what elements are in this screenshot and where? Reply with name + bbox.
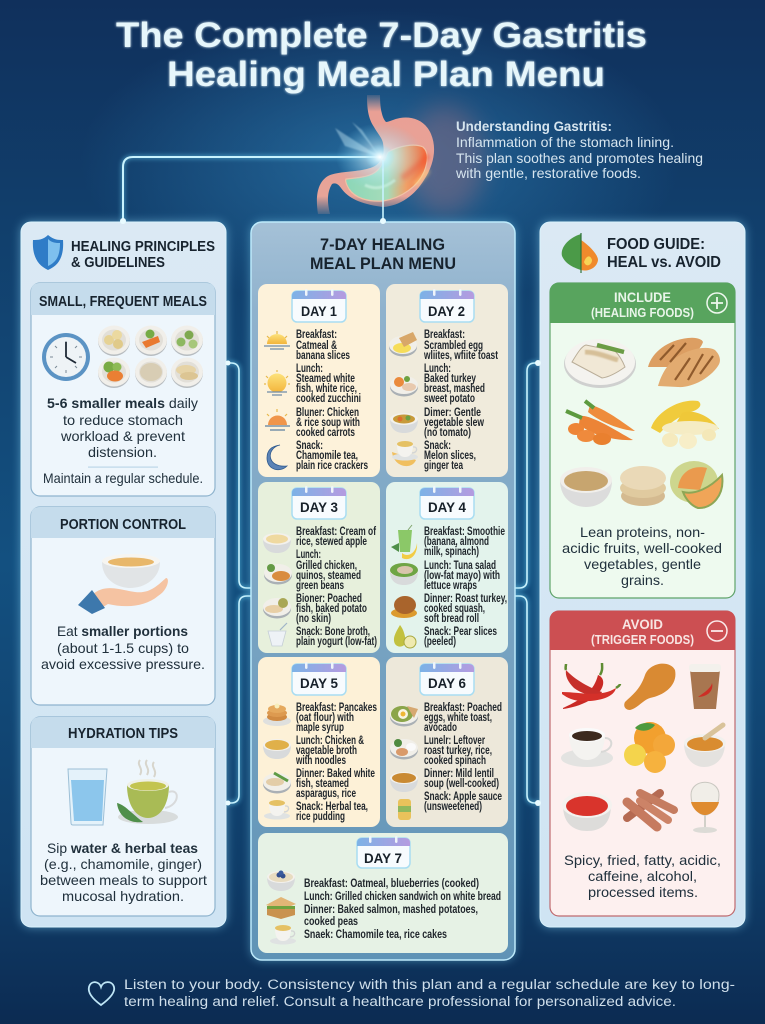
icon: bananas [651, 401, 719, 449]
icon: rice cakes [620, 466, 666, 506]
meal text: day 2: Snack: [424, 440, 451, 452]
icon: oatmeal with blueberries [267, 870, 295, 891]
meal text: day 6: (unsweetened) [424, 801, 482, 813]
panel: 7-day meal plan [251, 222, 515, 960]
icon: chili peppers [562, 663, 620, 709]
meal text: day 5: fish, steamed [296, 778, 349, 790]
icon: turkey plate [390, 376, 418, 396]
card text [564, 852, 721, 900]
card text: vegetables, gentle [584, 556, 701, 572]
icon: citrus [624, 722, 675, 773]
meal text: day 3: Bioner: Poached [296, 593, 362, 605]
heading: healing principles [71, 239, 215, 271]
meal text: day 2: Melon slices, [424, 450, 476, 462]
card text: Sip water & herbal teas [47, 840, 198, 856]
meal text: day 4: (low-fat mayo) with [424, 570, 500, 582]
meal text: day 7: cooked peas [304, 916, 358, 928]
meal text: day 2: (no tomato) [424, 427, 471, 439]
icon: heart [89, 982, 114, 1005]
icon: sunset [265, 409, 290, 430]
card text: distension. [88, 444, 157, 460]
icon: shield [33, 235, 63, 270]
meal text: day 3: fish, baked potato [296, 603, 367, 615]
meal text: day 1: Breakfast: [296, 329, 337, 341]
card text: (about 1-1.5 cups) to [57, 640, 189, 656]
badge: day 3: DAY 3 [300, 499, 338, 515]
icon: minus [707, 621, 727, 641]
meal text: day 3: green beans [296, 580, 344, 592]
card heading: SMALL, FREQUENT MEALS [39, 294, 207, 310]
icon: grilled chicken [648, 338, 720, 387]
icon: turkey and rice plate [390, 739, 418, 760]
icon: fried drumstick [624, 664, 675, 710]
intro text: understanding gastritis: Inflammation of the stomach lining. [456, 134, 674, 150]
card text: Eat smaller portions [57, 623, 188, 639]
meal text: day 4 [424, 526, 507, 648]
icon: poached fish plate [263, 598, 291, 618]
intro text: understanding gastritis: Understanding Gastritis: [456, 118, 612, 134]
icon: coffee to go [689, 664, 721, 709]
card text: workload & prevent [60, 428, 185, 444]
meal text: day 6: Breakfast: Poached [424, 702, 502, 714]
card: hydration tips [31, 717, 215, 916]
intro text: understanding gastritis: with gentle, restorative foods. [455, 165, 641, 181]
card heading: AVOID [622, 616, 663, 632]
heading: food guide: FOOD GUIDE: [607, 236, 705, 253]
meal text: day 5: Breakfast: Pancakes [296, 702, 377, 714]
card text: 5-6 smaller meals daily [47, 395, 198, 411]
meal text: day 6 [424, 702, 502, 813]
icon: hand holding bowl [78, 554, 168, 614]
meal text: day 6: Snack: Apple sauce [424, 791, 502, 803]
meal text: day 3 [296, 526, 377, 648]
meal text: day 1: cooked zucchini [296, 393, 361, 405]
card text: processed items. [588, 884, 698, 900]
card: day 2 [386, 284, 508, 477]
meal text: day 2: vegetable slew [424, 417, 484, 429]
heading: meal plan: 7-DAY HEALING [320, 236, 445, 254]
badge: day 4 [420, 486, 474, 519]
heading: healing principles: HEALING PRINCIPLES [71, 239, 215, 255]
meal text: day 6: roast turkey, rice, [424, 745, 492, 757]
badge: day 7 [357, 836, 410, 868]
meal text: day 5: maple syrup [296, 722, 344, 734]
meal text: day 2: ginger tea [424, 460, 463, 472]
meal text: day 4: Breakfast: Smoothie [424, 526, 505, 538]
card: avoid [550, 611, 735, 916]
footer note [124, 977, 735, 1009]
meal text: day 4: cooked squash, [424, 603, 485, 615]
meal text: day 2: wliites, wfiite toast [423, 350, 498, 362]
meal text: day 2: Scrambled egg [424, 340, 483, 352]
icon: spicy bowl [684, 725, 726, 767]
meal text: day 6: soup (well-cooked) [424, 778, 499, 790]
footer note: Listen to your body. Consistency with this plan and a regular schedule are key to long- [124, 977, 735, 992]
meal text: day 3: plain yogurt (low-fat) [296, 636, 377, 648]
meal text: day 2: breast, mashed [424, 383, 485, 395]
card text [40, 840, 207, 904]
meal text: day 1: banana slices [296, 350, 350, 362]
intro text: understanding gastritis [455, 118, 703, 181]
meal text: day 6: Dinner: Mild lentil [424, 768, 494, 780]
heading: healing principles: & GUIDELINES [71, 255, 165, 271]
icon: coffee cup [561, 728, 613, 767]
meal text: day 1: cooked carrots [296, 427, 355, 439]
meal text: day 1: Bluner: Chicken [296, 407, 359, 419]
card: portion control [31, 507, 215, 705]
icon: apple sauce jar [398, 799, 411, 820]
card heading: INCLUDE [614, 289, 671, 305]
meal text: day 4: (banana, almond [424, 536, 489, 548]
icon: chicken broth [263, 739, 291, 759]
icon: poached eggs and avocado [390, 706, 418, 726]
title [116, 16, 647, 94]
meal text: day 7: Snaek: Chamomile tea, rice cakes [304, 929, 447, 941]
icon: stomach illustration [317, 95, 434, 222]
meal text: day 5: Snack: Herbal tea, [296, 801, 368, 813]
card heading: PORTION CONTROL [60, 517, 186, 533]
card heading: (HEALING FOODS) [591, 305, 694, 320]
card text [47, 395, 198, 460]
icon: pancakes [263, 704, 291, 726]
icon: plus [707, 293, 727, 313]
footer note: term healing and relief. Consult a healthcare professional for personalized advice. [124, 994, 676, 1009]
meal text: day 1: Catmeal & [296, 340, 337, 352]
badge: day 6: DAY 6 [428, 675, 466, 691]
icon: smoothie [391, 525, 417, 559]
icon: melon [670, 461, 722, 508]
card text: grains. [621, 572, 664, 588]
icon: carrots [566, 401, 635, 445]
meal text: day 7 [304, 878, 501, 941]
meal text: day 3: Snack: Bone broth, [296, 626, 370, 638]
meal text: day 3: quinos, steamed [296, 570, 361, 582]
meal text: day 1 [296, 329, 368, 472]
icon: six small plates [98, 326, 203, 388]
icon: ketchup bowl [562, 792, 612, 831]
heading: meal plan: MEAL PLAN MENU [310, 255, 456, 273]
meal text: day 4: milk, spinach) [424, 546, 479, 558]
card: day 3 [258, 482, 380, 653]
meal text: day 4: Snack: Pear slices [424, 626, 497, 638]
card text: (e.g., chamomile, ginger) [44, 856, 202, 872]
icon: moon [267, 445, 287, 470]
card: small frequent meals [31, 283, 215, 496]
meal text: day 1: Snack: [296, 440, 323, 452]
meal text: day 5: vagetable broth [296, 745, 357, 757]
card text: to reduce stomach [63, 412, 183, 428]
meal text: day 6: avocado [424, 722, 457, 734]
meal text: day 1: Steamed white [296, 373, 355, 385]
meal text: day 3: Grilled chicken, [296, 560, 357, 572]
icon: roast turkey [391, 596, 417, 618]
meal text: day 4: Dinner: Roast turkey, [424, 593, 507, 605]
card: day 1 [258, 284, 380, 477]
meal text: day 4: (peeled) [424, 636, 456, 648]
badge: day 5: DAY 5 [300, 675, 338, 691]
badge: day 2: DAY 2 [428, 303, 465, 319]
icon: cream of rice [263, 533, 291, 553]
card text: mucosal hydration. [62, 888, 184, 904]
badge: day 5 [292, 662, 346, 695]
meal text: day 4: lettuce wraps [424, 580, 477, 592]
icon: midday sun [264, 370, 290, 395]
badge: day 4: DAY 4 [428, 499, 466, 515]
meal text: day 1: fish, white rice, [296, 383, 357, 395]
icon: clock [42, 333, 90, 381]
card: day 5 [258, 657, 380, 827]
meal text: day 1: & rice soup with [296, 417, 360, 429]
intro text: understanding gastritis: This plan soothes and promotes healing [456, 150, 703, 166]
card note: Maintain a regular schedule. [43, 470, 203, 486]
meal text: day 6: Lunelr: Leftover [424, 735, 485, 747]
icon: glass of water [68, 769, 107, 825]
card heading [591, 616, 694, 647]
badge: day 7: DAY 7 [364, 850, 402, 866]
card text: Spicy, fried, fatty, acidic, [564, 852, 721, 868]
meal text: day 2: Baked turkey [424, 373, 476, 385]
icon: oat bowl [560, 467, 612, 507]
icon: pear [394, 625, 416, 648]
card heading: HYDRATION TIPS [68, 726, 178, 742]
meal text: day 3: Lunch: [296, 549, 321, 561]
card: day 6 [386, 657, 508, 827]
card text: Lean proteins, non- [580, 524, 705, 540]
heading: food guide: HEAL vs. AVOID [607, 254, 721, 271]
meal text: day 7: Breakfast: Oatmeal, blueberries (cooked) [304, 878, 479, 890]
icon: baked fish plate [263, 773, 291, 794]
icon: sandwich [266, 897, 296, 919]
connector dots [120, 218, 541, 806]
badge: day 3 [292, 486, 346, 519]
icon: tuna salad [390, 563, 418, 585]
meal text: day 5: (oat flour) with [296, 712, 354, 724]
meal text: day 3: Breakfast: Cream of [296, 526, 376, 538]
meal text: day 3: (no skin) [296, 613, 331, 625]
meal text: day 2: Dimer: Gentle [424, 407, 481, 419]
icon: vegetable stew [390, 413, 418, 433]
icon: sunrise [264, 331, 290, 349]
meal text: day 1: Chamomile tea, [296, 450, 358, 462]
icon: herbal tea [264, 800, 290, 820]
badge: day 2 [420, 289, 474, 322]
icon: melon and tea [392, 441, 418, 466]
heading: food guide [607, 236, 721, 271]
badge: day 6 [420, 662, 474, 695]
icon: lentil soup [390, 772, 418, 792]
meal text: day 4: Lunch: Tuna salad [424, 560, 496, 572]
card text: between meals to support [40, 872, 207, 888]
meal text: day 2 [423, 329, 498, 472]
meal text: day 4: soft bread roll [424, 613, 479, 625]
meal text: day 6: eggs, white toast, [424, 712, 492, 724]
card heading: (TRIGGER FOODS) [591, 632, 694, 647]
icon: leaf and flame [562, 233, 598, 273]
meal text: day 5: with noodles [295, 755, 346, 767]
meal text: day 7: Lunch: Grilled chicken sandwich on white bread [304, 891, 501, 903]
title: Healing Meal Plan Menu [167, 55, 605, 94]
meal text: day 2: Breakfast: [424, 329, 465, 341]
title: The Complete 7-Day Gastritis [116, 16, 647, 55]
card: day 4 [386, 482, 508, 653]
meal text: day 7: Dinner: Baked salmon, mashed potatoes, [304, 904, 478, 916]
icon: chamomile tea [270, 925, 296, 944]
meal text: day 2: sweet potato [424, 393, 475, 405]
icon: yogurt cup [268, 623, 287, 646]
icon: brandy glass [691, 782, 719, 833]
badge: day 1 [292, 289, 346, 322]
icon: green tea [117, 760, 178, 824]
meal text: day 5: asparagus, rice [296, 788, 356, 800]
panel: healing principles [21, 222, 226, 927]
icon: fish plate [564, 339, 636, 388]
icon: sausages [627, 793, 674, 827]
meal text: day 3: rice, stewed apple [296, 536, 367, 548]
card: include [550, 283, 735, 598]
meal text: day 1: Lunch: [296, 363, 323, 375]
meal text: day 2: Lunch: [424, 363, 451, 375]
card text: avoid excessive pressure. [41, 656, 205, 672]
icon: egg and toast [389, 332, 417, 356]
heading: meal plan [310, 236, 456, 273]
meal text: day 5 [295, 702, 377, 823]
panel: food guide [540, 222, 745, 927]
meal text: day 5: rice pudding [296, 811, 345, 823]
meal text: day 5: Lunch: Chicken & [296, 735, 364, 747]
card text [41, 623, 205, 672]
card heading [591, 289, 694, 320]
card text [562, 524, 722, 588]
card text: caffeine, alcohol, [588, 868, 697, 884]
meal text: day 1: plain rice crackers [296, 460, 368, 472]
card: day 7 [258, 833, 508, 953]
meal text: day 5: Dinner: Baked white [296, 768, 375, 780]
meal text: day 6: cooked spinach [424, 755, 486, 767]
connector lines [123, 157, 540, 803]
badge: day 1: DAY 1 [301, 303, 337, 319]
card text: acidic fruits, well-cooked [562, 540, 722, 556]
icon: grilled chicken plate [264, 564, 292, 584]
